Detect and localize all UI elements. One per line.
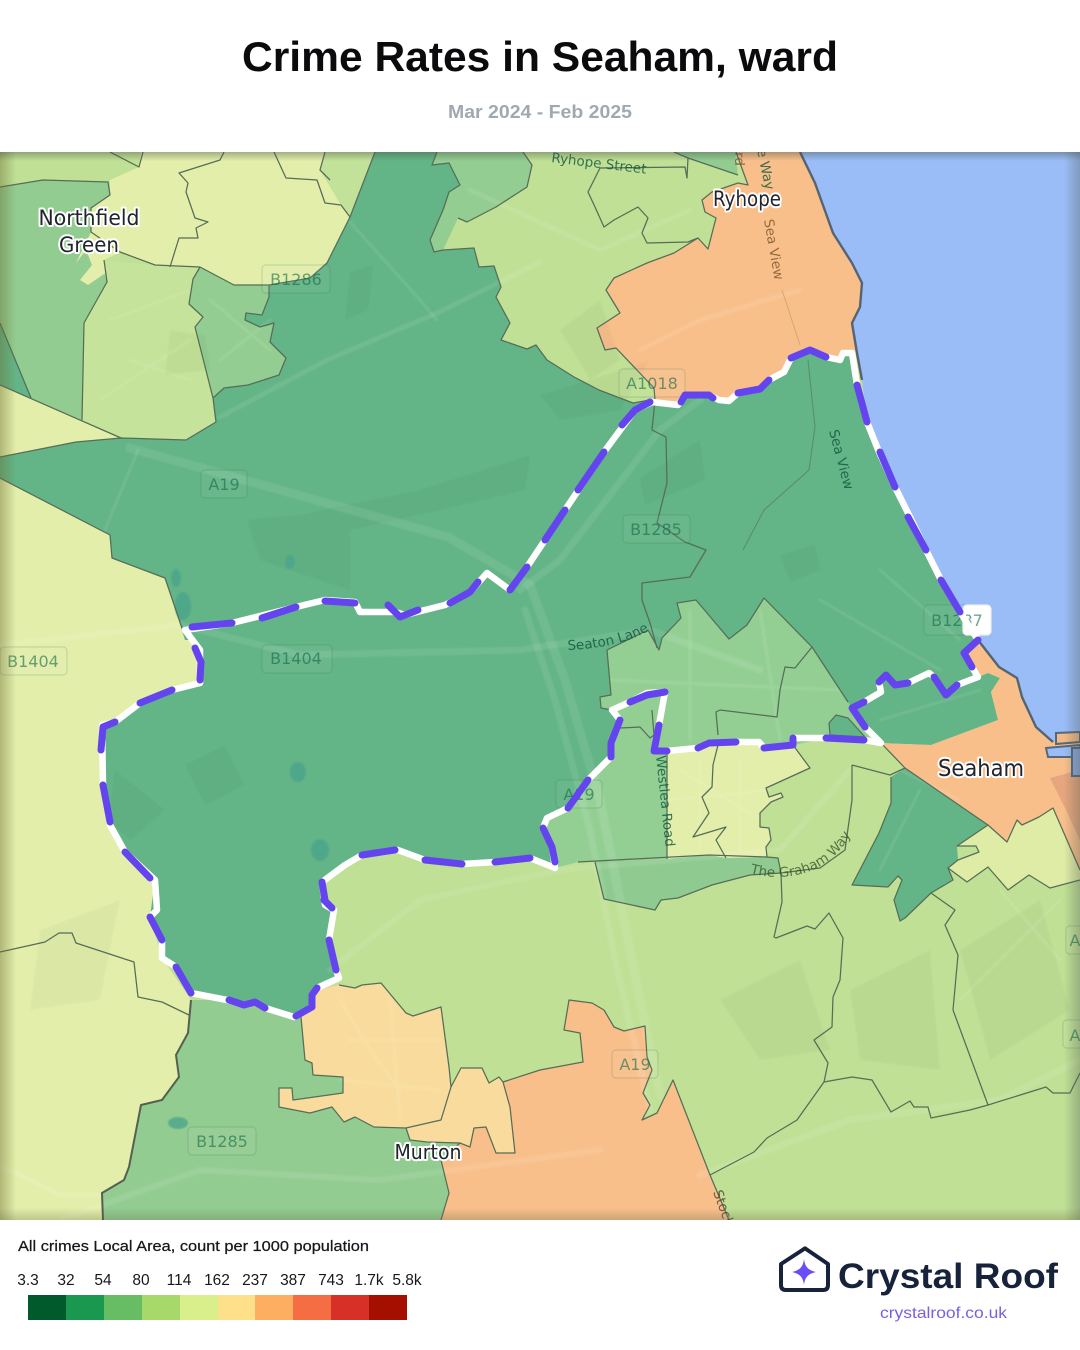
map edge shading xyxy=(0,152,1080,1220)
ward boundary: purple dashes xyxy=(101,350,978,1016)
legend title: All crimes Local Area, count per 1000 population xyxy=(18,1238,369,1255)
street names: Seaton Lane xyxy=(568,625,648,650)
area: Seaham orange xyxy=(881,640,1080,870)
road label: B1287 xyxy=(924,605,991,635)
area: south-east pale yellow xyxy=(948,808,1080,890)
area: mid green block xyxy=(189,267,286,398)
water bodies xyxy=(168,555,329,1129)
legend tick values: 387 xyxy=(280,1272,306,1289)
icon: house with star xyxy=(781,1248,828,1290)
area: north light green xyxy=(320,152,375,217)
place label: Northfield Green: Green xyxy=(59,233,119,257)
area: ward dark green xyxy=(102,350,978,1017)
road label: B1285 centre: B1285 xyxy=(630,520,682,539)
harbour xyxy=(1046,732,1080,776)
road label: B1285 south: B1285 xyxy=(196,1132,248,1151)
road label: A19 centre xyxy=(556,780,602,808)
street names: Sea View xyxy=(825,428,857,491)
street names xyxy=(539,152,852,1269)
road label: A19 south: A19 xyxy=(619,1055,651,1074)
area: west pale wedge xyxy=(0,385,121,457)
legend tick values: 162 xyxy=(204,1272,230,1289)
road label: B1285 centre xyxy=(623,515,690,543)
subtitle: date range: Mar 2024 - Feb 2025 xyxy=(448,102,632,122)
place label: Northfield Green xyxy=(38,206,140,257)
legend tick values: 3.3 xyxy=(17,1272,39,1289)
area: ward south-east mid green xyxy=(600,598,881,751)
legend tick values: 5.8k xyxy=(392,1272,422,1289)
area: south orange xyxy=(441,1000,729,1220)
area: far-left dark sliver xyxy=(0,323,31,398)
legend tick values: 32 xyxy=(57,1272,75,1289)
area: west pale large xyxy=(0,478,200,1220)
legend tick values: 80 xyxy=(132,1272,150,1289)
road label: B1404 centre: B1404 xyxy=(270,649,322,668)
legend tick values: 743 xyxy=(318,1272,344,1289)
street names: Westlea Road xyxy=(652,755,678,848)
area: Murton mid green xyxy=(102,1000,460,1220)
road label: B1286 xyxy=(262,265,330,293)
roads xyxy=(100,188,1072,1206)
logo wordmark: Crystal Roof xyxy=(838,1257,1058,1296)
road label: east edge xyxy=(1063,926,1080,1048)
legend tick values xyxy=(17,1272,422,1289)
place label: Seaham: Seaham xyxy=(938,756,1024,782)
area: Hollycarrside light green xyxy=(106,267,107,272)
logo xyxy=(781,1248,1058,1322)
road label: B1287: B1287 xyxy=(931,611,983,630)
area: sea xyxy=(800,152,1080,745)
road label: B1286: B1286 xyxy=(270,270,322,289)
street names: Stock xyxy=(709,1188,737,1229)
road label: A19 centre: A19 xyxy=(563,785,595,804)
legend tick values: 237 xyxy=(242,1272,268,1289)
legend tick values: 54 xyxy=(94,1272,112,1289)
street names: Sea View xyxy=(760,218,786,281)
area: top-left light green xyxy=(0,152,139,187)
area: Dawdon strip mid green xyxy=(578,855,781,910)
area: Ryhope orange xyxy=(597,152,862,405)
area: ward small dark patch xyxy=(829,715,865,737)
street names: rd xyxy=(731,152,747,166)
area: Seaham brown patch xyxy=(1050,770,1080,840)
road label: A1018 xyxy=(619,369,685,397)
title: Crime Rates in Seaham, ward xyxy=(242,33,838,80)
area: north mid strip xyxy=(430,152,532,252)
road label: A19 south xyxy=(612,1050,658,1078)
road label: A19 north: A19 xyxy=(208,475,240,494)
legend colour scale xyxy=(28,1295,407,1320)
place label: Northfield Green: Northfield xyxy=(38,206,140,230)
road label: A19 north xyxy=(201,470,247,498)
logo url: crystalroof.co.uk xyxy=(880,1305,1008,1322)
area: north pale yellow xyxy=(76,152,350,285)
street names: e Way xyxy=(753,148,777,191)
area: top strip mid green xyxy=(674,152,738,175)
ward boundary: white line xyxy=(102,350,978,1017)
road label: B1404 west: B1404 xyxy=(7,652,59,671)
legend tick values: 114 xyxy=(167,1272,192,1289)
street names: The Graham Way xyxy=(752,831,850,877)
road label: B1285 south xyxy=(188,1127,256,1155)
legend xyxy=(17,1238,422,1320)
place label: Murton: Murton xyxy=(394,1140,462,1164)
area: Westlea mid green xyxy=(543,692,667,868)
area: Northfield mid green xyxy=(0,180,110,420)
place label: Ryhope: Ryhope xyxy=(713,187,781,211)
road label: B1404 west xyxy=(0,647,67,675)
area: Murton sand xyxy=(279,983,515,1153)
area: Seaham dark green east xyxy=(852,673,1000,745)
area: south pale yellow xyxy=(667,742,810,859)
boundary lines xyxy=(0,152,1080,1220)
road label: A1018: A1018 xyxy=(626,374,678,393)
street names: Ryhope Street xyxy=(551,150,647,178)
legend tick values: 1.7k xyxy=(354,1272,384,1289)
area: Seaham dark green south xyxy=(852,768,988,921)
area: north dark green xyxy=(0,152,660,640)
road label: B1404 centre xyxy=(262,645,332,673)
field patches xyxy=(30,265,1070,1070)
